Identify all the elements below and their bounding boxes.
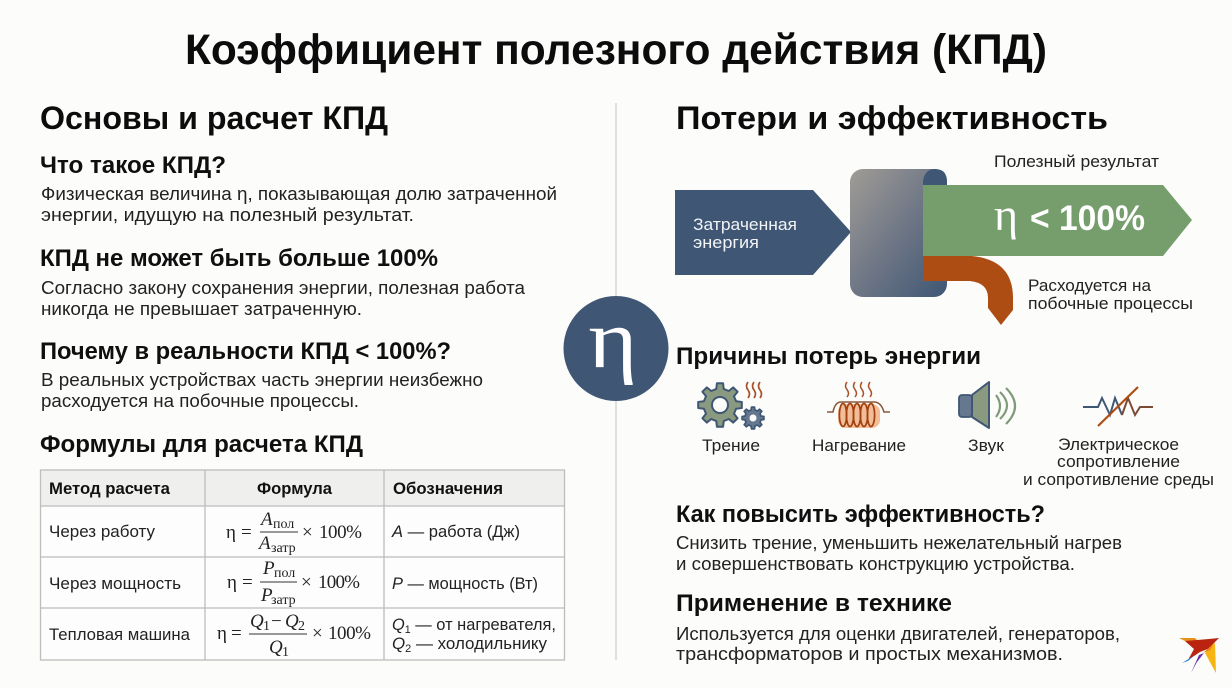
table: formulas (40, 470, 565, 660)
row: work: = (241, 522, 252, 543)
icon: heating coil (827, 382, 890, 428)
row: power: затр (271, 593, 296, 608)
cause: resistance (1023, 387, 1214, 489)
heading: basics: Основы и расчет КПД (40, 100, 388, 136)
arrow: input energy (675, 190, 851, 275)
row: heat engine: Q (392, 634, 405, 653)
label: sound: Звук (968, 436, 1005, 455)
text block: how to raise efficiency: Снизить трение, уменьшить нежелательный нагрев (676, 532, 1122, 553)
row: work: Через работу (49, 522, 155, 541)
text block: why below 100% (40, 338, 483, 411)
table header: Метод расчета (49, 479, 171, 498)
text block: cannot exceed 100% (40, 245, 526, 319)
arrow: useful result: < 100% (1030, 199, 1145, 238)
arrow: input energy: Затраченная (693, 215, 797, 234)
row: power: P (262, 558, 275, 579)
table header: Формула (257, 479, 333, 498)
row: heat engine: − (271, 611, 282, 632)
heading: causes: Причины потерь энергии (676, 343, 981, 370)
text block: how to raise efficiency: и совершенствовать конструкцию устройства. (676, 553, 1075, 574)
eta badge: η (588, 294, 638, 386)
label: resistance: сопротивление (1057, 452, 1180, 471)
converter block inner edge (923, 169, 947, 186)
text block: what is efficiency: энергии, идущую на полезный результат. (41, 204, 414, 225)
label: resistance: Электрическое (1058, 435, 1179, 454)
row: work: η (226, 522, 236, 543)
arrow: losses (923, 256, 1013, 325)
cause: sound (959, 382, 1015, 455)
label: friction: Трение (702, 436, 760, 455)
row: heat engine: 1 (263, 619, 270, 634)
row: work: A (259, 509, 273, 530)
row: heat engine: = (231, 623, 242, 644)
converter block (850, 169, 947, 297)
label: useful result: Полезный результат (994, 152, 1159, 171)
row: work (49, 509, 520, 556)
icon: speaker (959, 382, 1015, 428)
row: heat engine (49, 611, 556, 660)
text block: application: Применение в технике (676, 590, 952, 617)
table header (49, 479, 503, 498)
arrow: useful result: η (994, 189, 1018, 240)
row: heat engine: Тепловая машина (49, 625, 191, 644)
row: heat engine: Q (269, 637, 283, 658)
arrow: input energy: энергия (693, 233, 759, 252)
table header: Обозначения (393, 479, 503, 498)
panel: basics and calculation (40, 100, 565, 660)
text block: how to raise efficiency (676, 501, 1122, 574)
text block: cannot exceed 100%: Согласно закону сохранения энергии, полезная работа (41, 277, 526, 298)
row: heat engine: 100% (328, 623, 371, 644)
heading: losses: Потери и эффективность (676, 100, 1108, 136)
text block: why below 100%: Почему в реальности КПД < 100%? (40, 338, 451, 365)
row: power: 100% (318, 572, 360, 593)
text block: what is efficiency: Физическая величина η, показывающая долю затраченной (41, 183, 557, 204)
row: heat engine: 2 (298, 619, 305, 634)
label: resistance (1023, 435, 1214, 489)
row: heat engine: 1 (405, 624, 411, 636)
row: work: затр (271, 541, 296, 556)
row: work: A (257, 533, 271, 554)
row: heat engine: 2 (405, 643, 411, 655)
row: heat engine: η (217, 623, 227, 644)
row: work: × (302, 522, 313, 543)
row: heat engine: 1 (282, 645, 289, 660)
heading: formulas: Формулы для расчета КПД (40, 431, 363, 458)
row: heat engine: Q (285, 611, 299, 632)
arrow: useful result (923, 185, 1192, 256)
row: power: = (242, 572, 253, 593)
row: work: пол (273, 517, 294, 532)
icon: gears (698, 382, 764, 429)
label: side processes (1028, 276, 1193, 313)
row: work: 100% (319, 522, 362, 543)
text block: cannot exceed 100%: КПД не может быть больше 100% (40, 245, 438, 272)
text block: application: трансформаторов и простых механизмов. (676, 643, 1063, 664)
row: heat engine: — холодильнику (411, 634, 547, 653)
label: resistance: и сопротивление среды (1023, 470, 1214, 489)
row: heat engine: × (312, 623, 323, 644)
text block: how to raise efficiency: Как повысить эффективность? (676, 501, 1045, 528)
text block: why below 100%: расходуется на побочные процессы. (41, 390, 359, 411)
text block: why below 100%: В реальных устройствах часть энергии неизбежно (41, 369, 483, 390)
icon: resistor (1083, 387, 1153, 426)
row: power: пол (274, 566, 295, 581)
text block: cannot exceed 100%: никогда не превышает затраченную. (41, 298, 362, 319)
row: heat engine: Q (392, 615, 405, 634)
row: work: A — работа (Дж) (391, 522, 520, 541)
row: heat engine: — от нагревателя, (411, 615, 556, 634)
text block: application: Используется для оценки двигателей, генераторов, (676, 623, 1120, 644)
logo: swallow (1179, 638, 1219, 673)
row: power: Через мощность (49, 574, 181, 593)
panel: losses and efficiency (675, 100, 1214, 664)
row: power: × (301, 572, 312, 593)
row: power: η (227, 572, 237, 593)
row: power: P (260, 585, 273, 606)
text block: what is efficiency (40, 152, 557, 225)
row: power (49, 558, 538, 608)
cause: friction (698, 382, 764, 455)
label: side processes: Расходуется на (1028, 276, 1152, 295)
text block: what is efficiency: Что такое КПД? (40, 152, 226, 179)
row: heat engine: Q (250, 611, 264, 632)
label: side processes: побочные процессы (1028, 294, 1193, 313)
title: Коэффициент полезного действия (КПД) (185, 26, 1047, 74)
cause: heating (812, 382, 906, 455)
text block: application (676, 590, 1120, 664)
diagram: energy flow (675, 152, 1193, 325)
label: heating: Нагревание (812, 436, 906, 455)
row: power: P — мощность (Вт) (392, 574, 538, 593)
eta badge (564, 294, 668, 401)
